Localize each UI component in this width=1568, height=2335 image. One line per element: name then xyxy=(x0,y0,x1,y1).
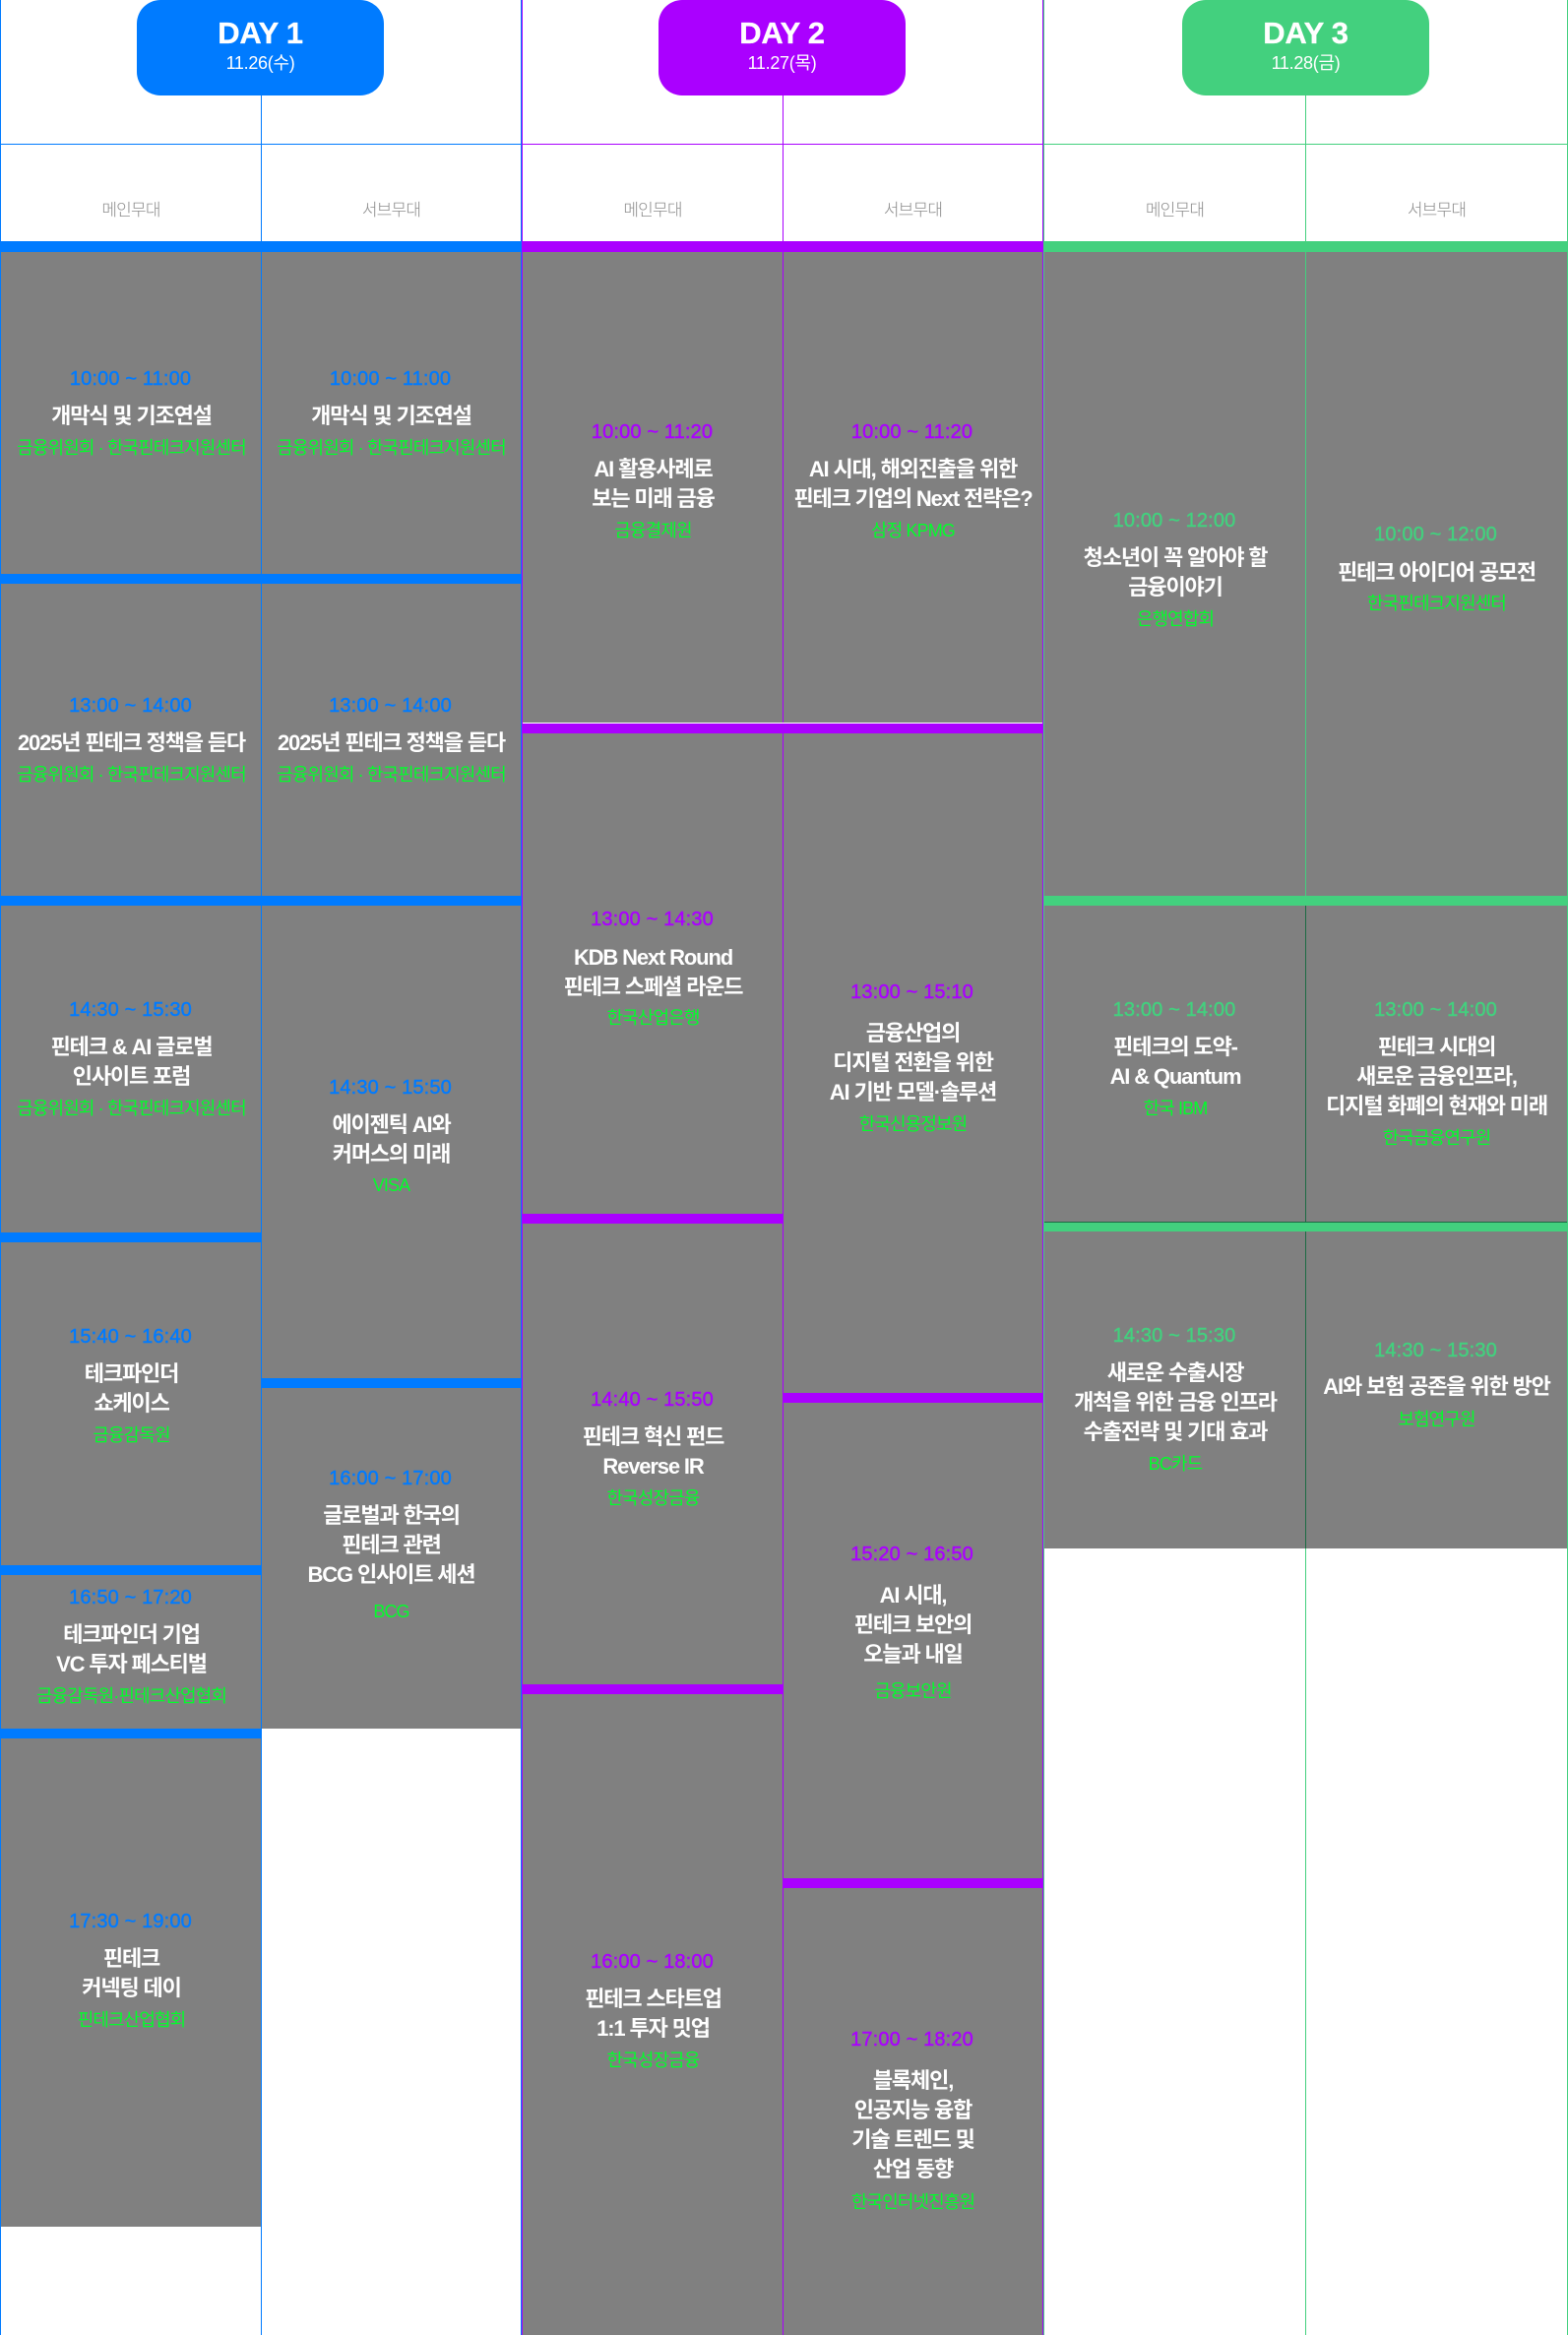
time: 13:00 ~ 14:00 xyxy=(1113,999,1235,1021)
day 2 header badge xyxy=(659,0,906,95)
day 2 date: 11.27(목) xyxy=(748,53,816,73)
session title: AI 활용사례로 xyxy=(594,457,713,481)
session title xyxy=(585,1987,721,2041)
session title xyxy=(1084,545,1268,600)
organizer: 한국인터넷진흥원 xyxy=(851,2192,974,2212)
session title: 테크파인더 기업 xyxy=(63,1622,200,1647)
session title: 새로운 금융인프라, xyxy=(1356,1064,1517,1089)
session: day 2 sub 15:20 xyxy=(784,1393,1042,1878)
time: 16:50 ~ 17:20 xyxy=(69,1587,192,1609)
organizer: BCG xyxy=(373,1602,409,1621)
session title xyxy=(583,1424,724,1479)
session: day 1 sub 16:00 xyxy=(262,1378,521,1729)
session: day 2 main 14:40 xyxy=(523,1214,784,1684)
organizer: 금융위원회 · 한국핀테크지원센터 xyxy=(17,1099,246,1118)
time: 14:40 ~ 15:50 xyxy=(591,1389,714,1411)
stage label: main: 메인무대 xyxy=(101,196,160,221)
panel: day 1 schedule xyxy=(0,0,522,2335)
time: 10:00 ~ 12:00 xyxy=(1374,524,1497,545)
time: 15:40 ~ 16:40 xyxy=(69,1326,192,1348)
time: 13:00 ~ 14:00 xyxy=(1374,999,1497,1021)
day 3 heading: DAY 3 xyxy=(1263,16,1348,50)
session: day 2 sub 17:00 xyxy=(784,1878,1042,2335)
session title xyxy=(592,457,715,511)
time: 10:00 ~ 11:20 xyxy=(592,421,713,443)
session: day 2 sub 10:00 xyxy=(784,241,1042,724)
session title: 테크파인더 xyxy=(85,1361,178,1386)
session title: 커머스의 미래 xyxy=(333,1142,450,1167)
session title: KDB Next Round xyxy=(574,945,732,970)
session title: 금융산업의 xyxy=(866,1021,960,1045)
organizer: 한국신용정보원 xyxy=(859,1114,967,1134)
session title xyxy=(851,2068,974,2181)
session title: AI 시대, 해외진출을 위한 xyxy=(809,457,1017,481)
day 3 header badge xyxy=(1182,0,1429,95)
session title: 2025년 핀테크 정책을 듣다 xyxy=(278,730,505,755)
organizer: 은행연합회 xyxy=(1137,609,1214,629)
session title: AI 시대, xyxy=(880,1583,946,1608)
session title: 핀테크 스페셜 라운드 xyxy=(564,975,742,999)
session title xyxy=(793,457,1033,511)
time: 13:00 ~ 15:10 xyxy=(850,981,973,1003)
time: 10:00 ~ 11:00 xyxy=(70,368,191,390)
stage label: main: 메인무대 xyxy=(623,196,682,221)
session title: AI 기반 모델·솔루션 xyxy=(830,1080,996,1104)
organizer: 한국 IBM xyxy=(1144,1099,1207,1118)
organizer: 금융감독원·핀테크산업협회 xyxy=(36,1686,226,1706)
panel: day 3 schedule xyxy=(1043,0,1568,2335)
session title: 글로벌과 한국의 xyxy=(323,1503,460,1528)
time: 14:30 ~ 15:30 xyxy=(1374,1340,1497,1361)
time: 17:30 ~ 19:00 xyxy=(69,1911,192,1932)
session title: VC 투자 페스티벌 xyxy=(56,1652,207,1676)
organizer: 한국성장금융 xyxy=(607,2051,699,2070)
session title: AI & Quantum xyxy=(1110,1064,1240,1089)
organizer: 한국성장금융 xyxy=(607,1488,699,1508)
session title: 에이젠틱 AI와 xyxy=(332,1112,451,1137)
session title xyxy=(1110,1035,1240,1089)
stage label: sub: 서브무대 xyxy=(1408,196,1466,221)
organizer: 금융위원회 · 한국핀테크지원센터 xyxy=(277,765,506,785)
time: 13:00 ~ 14:00 xyxy=(329,695,452,717)
time: 15:20 ~ 16:50 xyxy=(850,1544,973,1565)
session: day 1 sub 13:00 xyxy=(262,574,521,896)
session: day 2 main 10:00 xyxy=(523,241,784,724)
session title xyxy=(56,1622,207,1676)
session: day 1 main 14:30 xyxy=(1,896,262,1232)
session title xyxy=(85,1361,178,1416)
stage label: sub: 서브무대 xyxy=(884,196,942,221)
session title xyxy=(1074,1360,1278,1444)
session title: 핀테크 혁신 펀드 xyxy=(583,1424,723,1449)
panel: day 2 schedule xyxy=(522,0,1043,2335)
organizer: 금융결제원 xyxy=(614,521,692,540)
session: day 1 sub 10:00 xyxy=(262,241,521,574)
organizer: 금융보안원 xyxy=(874,1681,952,1701)
session title: 인공지능 융합 xyxy=(854,2098,972,2122)
session title: 인사이트 포럼 xyxy=(73,1064,190,1089)
time: 10:00 ~ 12:00 xyxy=(1113,510,1235,532)
session title: 금융이야기 xyxy=(1128,575,1223,600)
session: day 3 main 10:00 xyxy=(1044,241,1306,896)
day 2 heading: DAY 2 xyxy=(739,16,825,50)
organizer: 한국핀테크지원센터 xyxy=(1367,594,1506,613)
session: day 1 main 16:50 xyxy=(1,1565,262,1729)
session title xyxy=(1326,1035,1547,1118)
session title: BCG 인사이트 세션 xyxy=(308,1562,474,1587)
session: day 2 main 13:00 xyxy=(523,723,784,1214)
organizer: 보험연구원 xyxy=(1398,1410,1475,1429)
session title: 2025년 핀테크 정책을 듣다 xyxy=(18,730,245,755)
organizer: BC카드 xyxy=(1149,1454,1202,1474)
time: 16:00 ~ 17:00 xyxy=(329,1468,452,1489)
time: 13:00 ~ 14:30 xyxy=(591,909,714,930)
organizer: 핀테크산업협회 xyxy=(78,2010,185,2030)
session: day 3 main 13:00 xyxy=(1044,896,1306,1223)
session: day 3 main 14:30 xyxy=(1044,1223,1306,1548)
stage label: sub: 서브무대 xyxy=(362,196,420,221)
session title: 핀테크 아이디어 공모전 xyxy=(1338,560,1536,585)
session title: AI와 보험 공존을 위한 방안 xyxy=(1323,1374,1550,1399)
organizer: 금융위원회 · 한국핀테크지원센터 xyxy=(17,765,246,785)
session title: 산업 동향 xyxy=(873,2157,953,2181)
session: day 2 sub 13:00 xyxy=(784,723,1042,1393)
session title: 새로운 수출시장 xyxy=(1107,1360,1243,1385)
session: day 1 main 17:30 xyxy=(1,1729,262,2227)
time: 10:00 ~ 11:00 xyxy=(330,368,451,390)
session: day 3 sub 13:00 xyxy=(1306,896,1567,1223)
session title: 핀테크 시대의 xyxy=(1378,1035,1495,1059)
organizer: 한국산업은행 xyxy=(607,1008,699,1028)
time: 13:00 ~ 14:00 xyxy=(69,695,192,717)
day 1 heading: DAY 1 xyxy=(218,16,303,50)
session: day 1 main 10:00 xyxy=(1,241,262,574)
time: 14:30 ~ 15:30 xyxy=(1113,1325,1235,1347)
session: day 1 main 13:00 xyxy=(1,574,262,896)
organizer: 금융감독원 xyxy=(93,1425,170,1445)
session title: 쇼케이스 xyxy=(94,1391,169,1416)
time: 14:30 ~ 15:30 xyxy=(69,999,192,1021)
session: day 1 main 15:40 xyxy=(1,1232,262,1565)
organizer: 삼정 KPMG xyxy=(871,521,955,540)
session title: 핀테크 보안의 xyxy=(854,1612,972,1637)
session title: 디지털 전환을 위한 xyxy=(833,1050,993,1075)
session title: 핀테크 관련 xyxy=(342,1533,441,1557)
organizer: 금융위원회 · 한국핀테크지원센터 xyxy=(277,438,506,458)
day 1 header badge xyxy=(137,0,384,95)
session title: 개막식 및 기조연설 xyxy=(51,404,212,428)
session title: 핀테크 스타트업 xyxy=(585,1987,721,2011)
session title: 핀테크 & AI 글로벌 xyxy=(51,1035,212,1059)
session: day 1 sub 14:30 xyxy=(262,896,521,1378)
session title: 수출전략 및 기대 효과 xyxy=(1084,1420,1267,1444)
organizer: 금융위원회 · 한국핀테크지원센터 xyxy=(17,438,246,458)
session title xyxy=(564,945,743,999)
session title: 개척을 위한 금융 인프라 xyxy=(1074,1390,1277,1415)
session title xyxy=(830,1021,996,1104)
session title: 핀테크 xyxy=(103,1946,159,1971)
organizer: VISA xyxy=(373,1175,409,1195)
time: 16:00 ~ 18:00 xyxy=(591,1951,714,1973)
session title xyxy=(82,1946,181,2000)
session: day 3 sub 14:30 xyxy=(1306,1223,1567,1548)
session title: 1:1 투자 밋업 xyxy=(596,2016,710,2041)
session title: 커넥팅 데이 xyxy=(82,1976,181,2000)
time: 14:30 ~ 15:50 xyxy=(329,1077,452,1099)
day 3 date: 11.28(금) xyxy=(1272,53,1340,73)
session title xyxy=(854,1583,972,1667)
session title: 기술 트렌드 및 xyxy=(851,2127,974,2152)
session title xyxy=(308,1503,474,1587)
session title: Reverse IR xyxy=(602,1454,704,1479)
session title: 디지털 화폐의 현재와 미래 xyxy=(1326,1094,1547,1118)
session title: 핀테크의 도약- xyxy=(1113,1035,1237,1059)
time: 17:00 ~ 18:20 xyxy=(850,2029,973,2051)
stage label: main: 메인무대 xyxy=(1146,196,1204,221)
session: day 2 main 16:00 xyxy=(523,1684,784,2335)
time: 10:00 ~ 11:20 xyxy=(851,421,972,443)
session title xyxy=(51,1035,212,1089)
organizer: 한국금융연구원 xyxy=(1383,1128,1490,1148)
day 1 date: 11.26(수) xyxy=(226,53,294,73)
session title xyxy=(332,1112,451,1167)
session title: 개막식 및 기조연설 xyxy=(311,404,471,428)
session title: 블록체인, xyxy=(873,2068,953,2093)
session title: 보는 미래 금융 xyxy=(592,486,715,511)
session title: 청소년이 꼭 알아야 할 xyxy=(1084,545,1267,570)
session: day 3 sub 10:00 xyxy=(1306,241,1567,896)
session title: 핀테크 기업의 Next 전략은? xyxy=(793,486,1033,511)
session title: 오늘과 내일 xyxy=(863,1642,963,1667)
